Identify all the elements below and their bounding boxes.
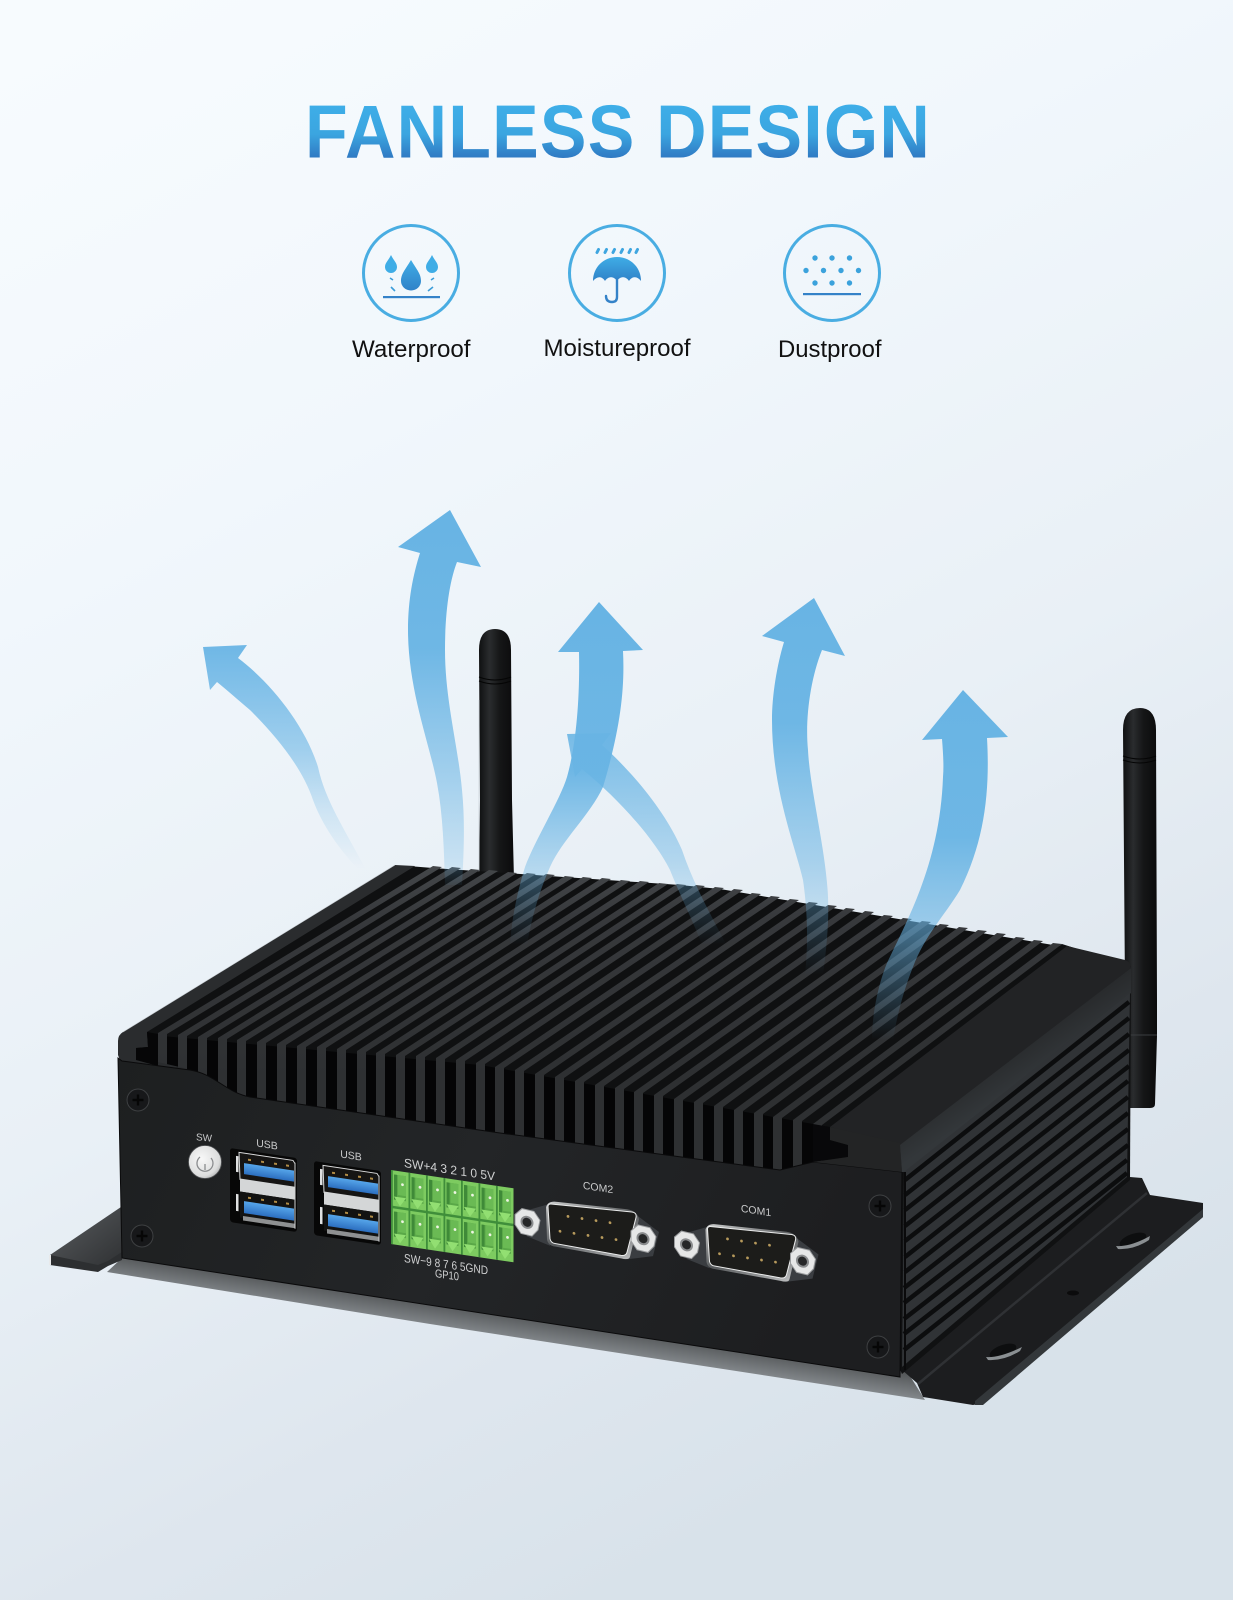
airflow arrows [203, 510, 1008, 1040]
COM1 serial port [674, 1215, 818, 1287]
label: GPIO name: GP10 [435, 1268, 459, 1284]
device: fanless industrial computer [50, 865, 1203, 1405]
antenna: right [1123, 708, 1157, 1108]
right mounting flange [902, 1177, 1203, 1405]
label: USB 2: USB [340, 1148, 362, 1164]
ribbed side wall [902, 993, 1130, 1370]
arrow 3 [510, 602, 643, 945]
label: COM1: COM1 [741, 1203, 771, 1219]
label: COM2: COM2 [583, 1180, 613, 1196]
USB ports: second stack [314, 1161, 381, 1245]
arrow 2 [398, 510, 481, 885]
label: moistureproof: Moistureproof [544, 335, 691, 362]
heatsink fins [158, 866, 1062, 1172]
heatsink base [135, 866, 1065, 1170]
icon: waterproof [364, 226, 458, 320]
label: GPIO bottom: SW−9 8 7 6 5GND [404, 1251, 488, 1278]
label: waterproof: Waterproof [352, 336, 471, 363]
arrow 6 [872, 690, 1008, 1040]
power button [188, 1146, 222, 1178]
front panel [118, 1058, 902, 1377]
green GPIO terminal [391, 1170, 514, 1262]
icon: dustproof [784, 226, 880, 320]
label: SW: SW [196, 1132, 213, 1145]
icon: moistureproof [570, 226, 664, 320]
left end cap [118, 865, 415, 1068]
COM2 serial port [515, 1193, 659, 1264]
feature icons row [352, 226, 882, 363]
label: dustproof: Dustproof [778, 336, 882, 363]
end cap top face [830, 946, 1131, 1146]
label: GPIO top: SW+4 3 2 1 0 5V [404, 1156, 496, 1184]
USB ports: first stack [230, 1148, 297, 1232]
antenna: left [479, 629, 514, 880]
heatsink front gaps [140, 1034, 813, 1172]
arrow 5 [762, 598, 845, 975]
end cap bevel [900, 968, 1131, 1172]
arrow 4 [567, 733, 726, 944]
left mounting flange [50, 1207, 123, 1272]
shadow under device [107, 1258, 925, 1400]
body backing [813, 944, 1131, 1374]
arrow 1 [203, 645, 365, 868]
title: FANLESS DESIGN [305, 90, 931, 174]
label: USB 1: USB [256, 1137, 278, 1153]
screws [127, 1089, 891, 1358]
right end cap [813, 946, 1131, 1370]
end cap slot [813, 1124, 848, 1162]
